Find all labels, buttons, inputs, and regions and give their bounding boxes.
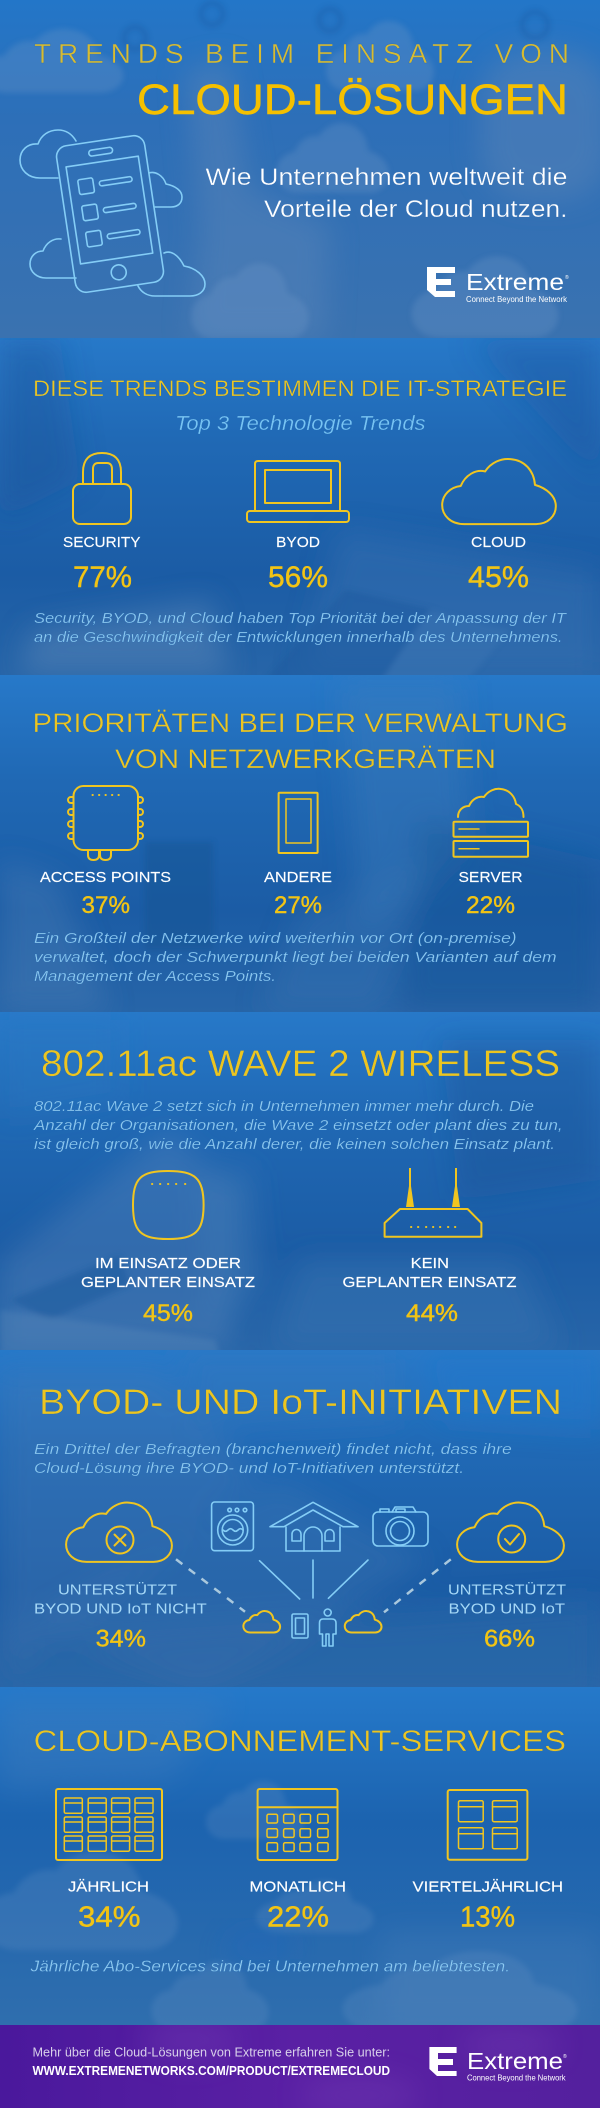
stat: does not support	[34, 1580, 207, 1653]
logo: Extreme	[429, 2047, 567, 2083]
background photo: hands on a laptop	[0, 1020, 600, 1355]
background photo: laptop and hands	[0, 340, 600, 690]
background photo: clouds and network	[0, 1700, 600, 2033]
icon: laptop	[247, 461, 349, 522]
icon: washing machine	[212, 1502, 253, 1551]
logo: Extreme: Connect Beyond the Network	[466, 295, 568, 304]
panel: cloud subscription services	[0, 1687, 600, 2033]
panel: IT strategy trends	[0, 338, 600, 690]
heading: BYOD- UND IoT-INITIATIVEN	[39, 1383, 562, 1422]
paragraph: Ein Drittel der Befragten (branchenweit) findet nicht, dass ihre	[34, 1441, 512, 1458]
logo: Extreme: ®	[565, 274, 569, 281]
heading: CLOUD-ABONNEMENT-SERVICES	[34, 1725, 566, 1758]
logo: Extreme	[427, 267, 569, 304]
panel: 802.11ac wave 2 wireless	[0, 1012, 600, 1355]
stat: does not support: UNTERSTÜTZT	[58, 1580, 177, 1598]
connector: dashed line left	[176, 1559, 245, 1612]
panel: header	[0, 0, 600, 340]
stat: deployed or planned	[81, 1255, 255, 1327]
stat: deployed or planned: GEPLANTER EINSATZ	[81, 1274, 255, 1291]
paragraph	[34, 610, 568, 646]
subtitle	[206, 164, 568, 223]
paragraph: 802.11ac Wave 2 setzt sich in Unternehmen immer mehr durch. Die	[34, 1098, 534, 1115]
stat: supports: UNTERSTÜTZT	[448, 1580, 566, 1598]
icon: small cloud right	[345, 1611, 382, 1633]
icon: access point	[68, 786, 143, 860]
stat: byod: BYOD	[276, 534, 320, 551]
icon: smartphone with clouds	[20, 130, 205, 296]
logo: Extreme: Extreme	[466, 269, 564, 295]
stat: monthly: 22%	[267, 1902, 329, 1934]
stat: no deployment planned	[342, 1255, 516, 1327]
paragraph: Security, BYOD, und Cloud haben Top Priorität bei der Anpassung der IT	[34, 610, 568, 627]
background photo: faces	[159, 2026, 534, 2104]
paragraph: an die Geschwindigkeit der Entwicklungen innerhalb des Unternehmens.	[34, 629, 562, 646]
stat: security: 77%	[73, 561, 132, 594]
icon: padlock	[73, 453, 131, 524]
stat: deployed or planned: 45%	[143, 1300, 193, 1327]
subtitle: Wie Unternehmen weltweit die	[206, 164, 568, 191]
stat: does not support: BYOD UND IoT NICHT	[34, 1600, 207, 1617]
paragraph: Jährliche Abo-Services sind bei Unternehmen am beliebtesten.	[30, 1959, 510, 1976]
stat: supports: 66%	[484, 1626, 535, 1653]
stat: byod: 56%	[268, 561, 328, 594]
heading	[32, 708, 568, 774]
stat: monthly: MONATLICH	[250, 1878, 346, 1895]
stat: security: SECURITY	[63, 534, 140, 551]
stat: cloud	[468, 534, 529, 594]
paragraph	[33, 1098, 563, 1153]
stat: server: 22%	[466, 892, 515, 919]
call to action text	[32, 2046, 390, 2078]
paragraph: verwaltet, doch der Schwerpunkt liegt bei beiden Varianten auf dem	[34, 949, 556, 966]
stat: andere	[264, 869, 332, 919]
background photo: laptop on a desk	[3, 1380, 402, 1686]
subtitle: Vorteile der Cloud nutzen.	[264, 196, 568, 223]
icon: cloud with check	[457, 1503, 564, 1562]
call to action text: WWW.EXTREMENETWORKS.COM/PRODUCT/EXTREMECLOUD	[32, 2064, 390, 2078]
stat: access points: ACCESS POINTS	[40, 869, 171, 886]
icon: wireless access point	[133, 1171, 204, 1239]
stat: supports	[448, 1580, 566, 1653]
icon: small cloud left	[243, 1611, 280, 1633]
stat: does not support: 34%	[96, 1626, 146, 1653]
title line 1: TRENDS BEIM EINSATZ VON	[34, 38, 569, 69]
stat: supports: BYOD UND IoT	[448, 1600, 565, 1617]
paragraph	[34, 930, 556, 985]
icon: other device	[279, 793, 318, 853]
stat: no deployment planned: GEPLANTER EINSATZ	[342, 1274, 516, 1291]
stat: deployed or planned: IM EINSATZ ODER	[95, 1255, 241, 1272]
background photo: people at a desk	[0, 680, 600, 1012]
stat: andere: 27%	[274, 892, 322, 919]
background photo: hand and clouds	[0, 3, 600, 340]
stat: no deployment planned: KEIN	[411, 1255, 449, 1272]
stat: yearly	[68, 1878, 149, 1934]
panel: network device management priorities	[0, 675, 600, 1012]
icon: yearly calendar	[56, 1789, 162, 1860]
panel: footer call to action	[0, 2018, 600, 2108]
stat: andere: ANDERE	[264, 869, 332, 886]
stat: monthly	[250, 1878, 346, 1934]
call to action text: Mehr über die Cloud-Lösungen von Extreme erfahren Sie unter:	[32, 2046, 390, 2060]
icon: small phone	[292, 1614, 308, 1638]
icon: router	[385, 1168, 481, 1237]
stat: cloud: 45%	[468, 561, 529, 594]
icon: person	[320, 1609, 336, 1646]
subheading: Top 3 Technologie Trends	[175, 413, 426, 435]
icon: camera	[373, 1507, 428, 1546]
icon: server with cloud	[454, 789, 528, 857]
stat: yearly: JÄHRLICH	[68, 1878, 149, 1895]
stat: server	[458, 869, 523, 919]
stat: quarterly	[412, 1878, 563, 1934]
heading: VON NETZWERKGERÄTEN	[115, 744, 496, 774]
paragraph: Ein Großteil der Netzwerke wird weiterhin vor Ort (on-premise)	[34, 930, 517, 947]
connector: dashed line right	[384, 1559, 451, 1612]
icon: cloud	[442, 459, 556, 524]
stat: access points	[40, 869, 171, 919]
logo: Extreme: Connect Beyond the Network	[467, 2074, 567, 2083]
stat: server: SERVER	[458, 869, 523, 886]
stat: cloud: CLOUD	[471, 534, 526, 551]
paragraph: Cloud-Lösung ihre BYOD- und IoT-Initiativen unterstützt.	[34, 1460, 464, 1477]
panel: BYOD and IoT initiatives	[0, 1350, 600, 1700]
icon: cloud with cross	[66, 1503, 172, 1562]
paragraph	[34, 1441, 512, 1477]
stat: quarterly: 13%	[460, 1902, 515, 1934]
icon: house	[270, 1502, 358, 1551]
stat: access points: 37%	[82, 892, 130, 919]
stat: security	[63, 534, 140, 594]
stat: no deployment planned: 44%	[406, 1300, 458, 1327]
heading: DIESE TRENDS BESTIMMEN DIE IT-STRATEGIE	[33, 376, 567, 401]
icon: quarterly calendar	[448, 1790, 527, 1860]
paragraph: ist gleich groß, wie die Anzahl derer, die keinen solchen Einsatz plant.	[34, 1136, 555, 1153]
paragraph: Management der Access Points.	[34, 968, 276, 985]
stat: yearly: 34%	[78, 1902, 140, 1934]
title line 2: CLOUD-LÖSUNGEN	[137, 76, 568, 124]
heading: PRIORITÄTEN BEI DER VERWALTUNG	[32, 708, 568, 738]
connector lines: devices to user	[260, 1560, 368, 1599]
logo: Extreme: ®	[563, 2053, 567, 2060]
stat: byod	[268, 534, 328, 594]
stat: quarterly: VIERTELJÄHRLICH	[412, 1878, 563, 1895]
logo: Extreme: Extreme	[467, 2048, 563, 2074]
icon: monthly calendar	[258, 1789, 338, 1860]
heading: 802.11ac WAVE 2 WIRELESS	[41, 1043, 560, 1084]
paragraph: Anzahl der Organisationen, die Wave 2 einsetzt oder plant dies zu tun,	[33, 1117, 563, 1134]
